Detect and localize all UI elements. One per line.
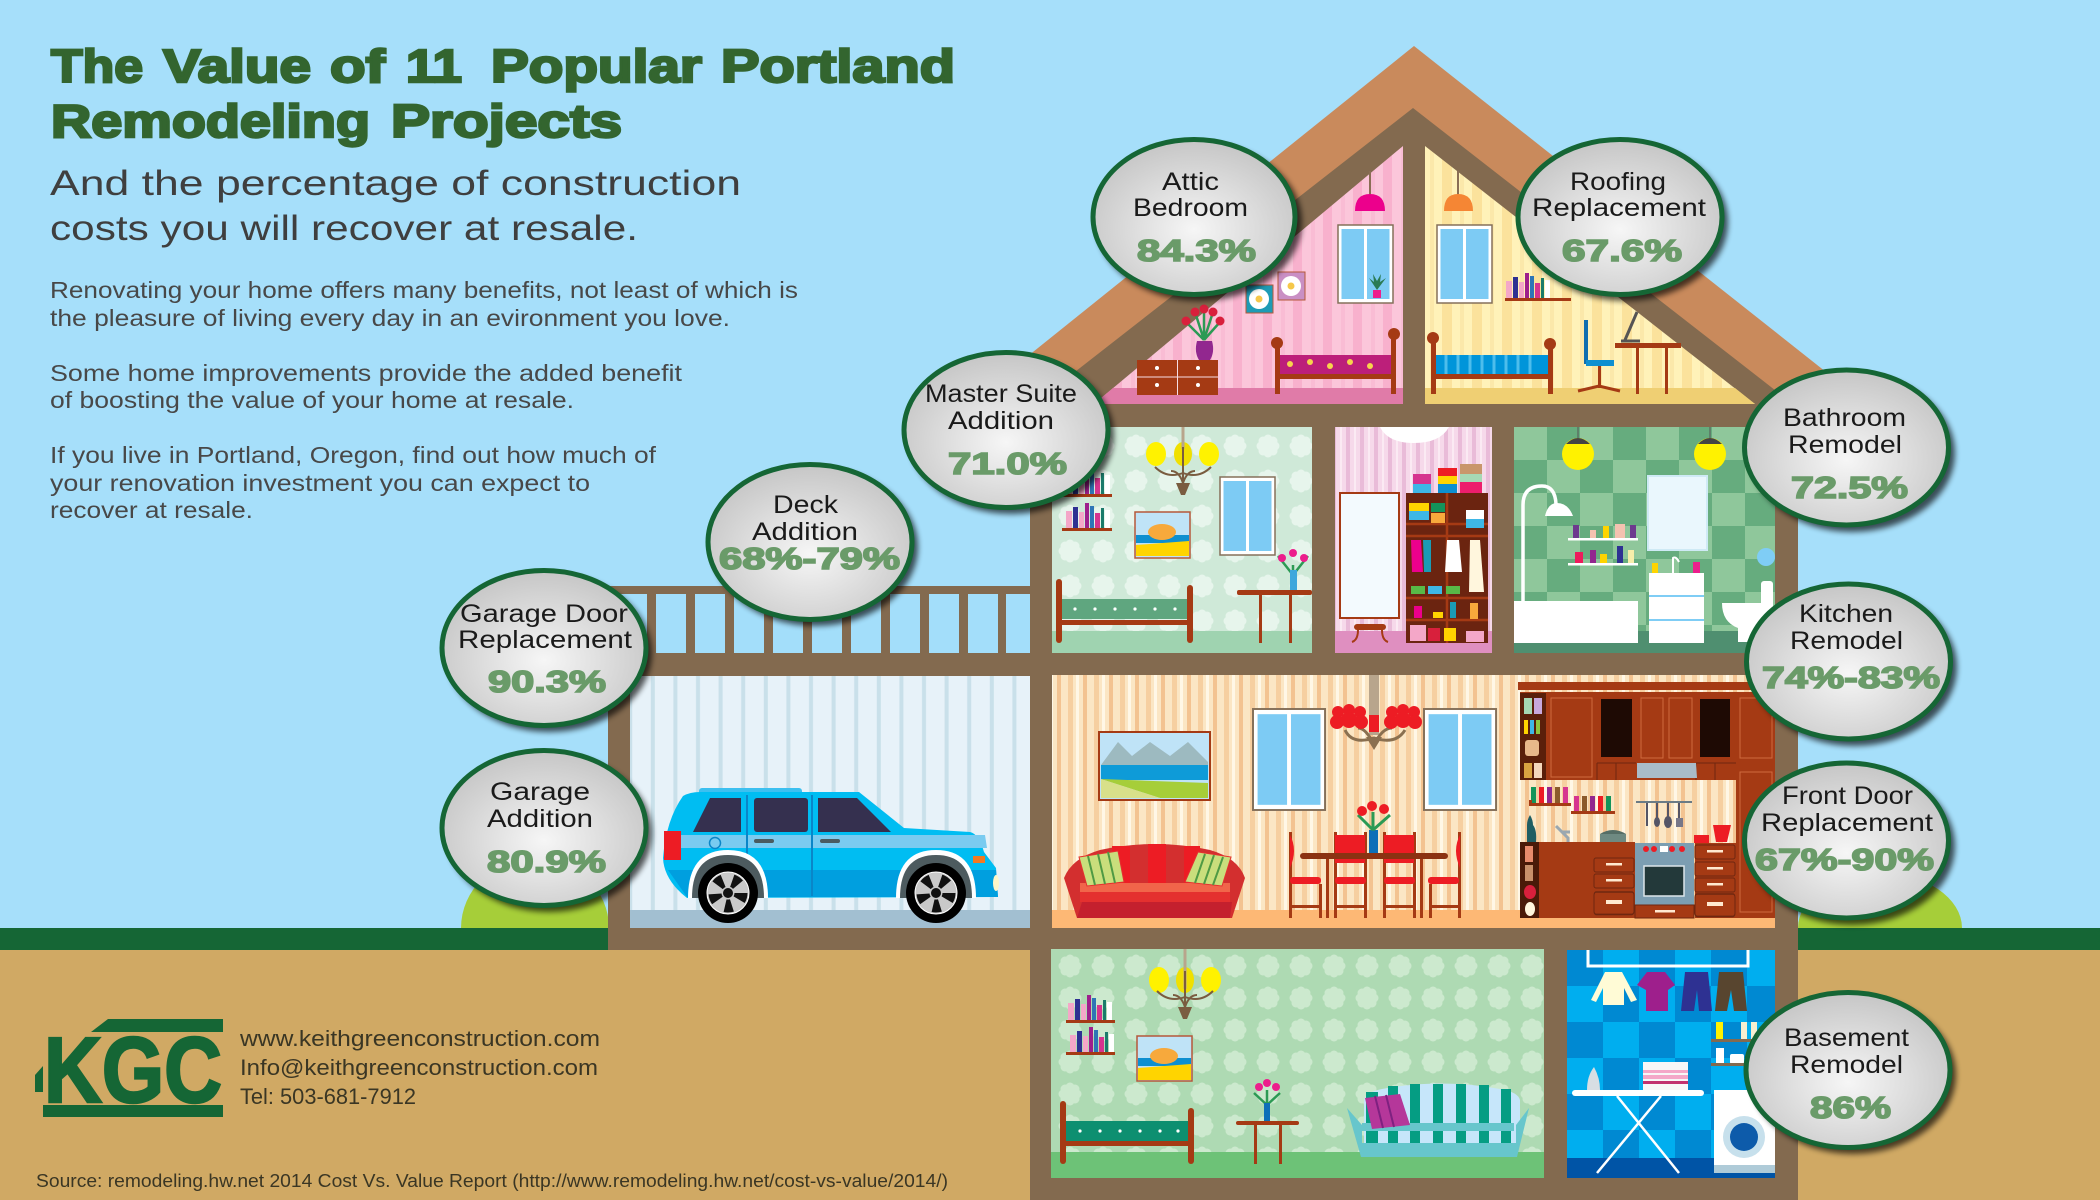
- room: garage: [630, 676, 1030, 928]
- title: Popular: [491, 40, 702, 92]
- intro text: If you live in Portland, Oregon, find out how much of: [50, 442, 657, 468]
- kitchen: [1518, 682, 1775, 918]
- sofa: [1347, 1084, 1529, 1157]
- stool: [1352, 624, 1388, 642]
- subtitle: costs you will recover at resale.: [50, 209, 638, 248]
- ironing board: [1572, 1090, 1704, 1173]
- bubble: deck addition: Deck: [773, 491, 839, 519]
- bubble: front door replacement: [1744, 763, 1955, 925]
- bubble: garage addition: Garage: [490, 778, 590, 806]
- bed: [1427, 332, 1556, 394]
- intro text: the pleasure of living every day in an evironment you love.: [50, 305, 730, 331]
- bubble: roofing replacement: 67.6%: [1562, 233, 1682, 268]
- ground: [0, 950, 2100, 1200]
- chandelier: [1146, 427, 1219, 495]
- bubble: master suite addition: Addition: [948, 407, 1054, 435]
- table and vase: [1237, 549, 1312, 643]
- bubble: kitchen remodel: 74%-83%: [1762, 660, 1940, 695]
- oven: [1635, 843, 1694, 918]
- subtitle: [50, 164, 741, 248]
- bubble: garage door replacement: Replacement: [458, 626, 632, 654]
- intro text: recover at resale.: [50, 497, 253, 523]
- bubble: bathroom remodel: 72.5%: [1791, 470, 1908, 505]
- washing machine: [1714, 1090, 1775, 1173]
- bubble: roofing replacement: Replacement: [1532, 194, 1706, 222]
- bubble: basement remodel: Basement: [1784, 1024, 1909, 1052]
- toilet: [1722, 548, 1775, 642]
- bubble: roofing replacement: Roofing: [1570, 168, 1666, 196]
- contact details: [239, 1026, 600, 1109]
- bubble: bathroom remodel: Bathroom: [1783, 404, 1906, 432]
- rear wheel: [688, 850, 768, 923]
- contact details: www.keithgreenconstruction.com: [239, 1026, 600, 1051]
- bed: [1060, 1101, 1194, 1164]
- bubble: garage door replacement: 90.3%: [488, 664, 606, 699]
- dresser: [1137, 360, 1218, 395]
- chandelier: [1330, 675, 1422, 750]
- source note: Source: remodeling.hw.net 2014 Cost Vs. Value Report (http://www.remodeling.hw.net/cost-vs-value/2014/): [36, 1171, 948, 1191]
- bubble: attic bedroom: 84.3%: [1137, 233, 1256, 268]
- title: Portland: [721, 40, 955, 92]
- intro text: [50, 277, 798, 523]
- bed: [1056, 579, 1193, 643]
- bubble: basement remodel: Remodel: [1790, 1051, 1903, 1079]
- bathtub: [1514, 601, 1638, 643]
- garage frame and railing: [608, 586, 1032, 950]
- stacked boxes: [1413, 464, 1482, 493]
- bubble: deck addition: 68%-79%: [719, 541, 900, 576]
- countertop items: [1527, 815, 1731, 843]
- sink cabinet: [1649, 558, 1704, 643]
- intro text: of boosting the value of your home at resale.: [50, 387, 574, 413]
- left bush: [461, 858, 609, 998]
- bed: [1271, 328, 1400, 394]
- title: The: [51, 40, 143, 92]
- bubble: front door replacement: Replacement: [1761, 809, 1933, 837]
- chandelier: [1149, 949, 1221, 1019]
- bubble: front door replacement: Front Door: [1782, 782, 1913, 810]
- spice shelves: [1529, 787, 1615, 814]
- shelves with books: [1066, 995, 1115, 1055]
- window: [1437, 225, 1492, 303]
- intro text: Renovating your home offers many benefits, not least of which is: [50, 277, 798, 303]
- upper cabinets: [1518, 682, 1775, 780]
- room: closet: [1335, 427, 1492, 653]
- intro text: your renovation investment you can expect to: [50, 470, 590, 496]
- dining set: [1289, 801, 1461, 918]
- picture: [1137, 1036, 1192, 1081]
- title: [51, 40, 955, 147]
- lamp: [1355, 171, 1385, 211]
- folded towels: [1643, 1062, 1688, 1090]
- grass strip: [0, 928, 2100, 950]
- bubble: master suite addition: [904, 352, 1114, 514]
- desk and monitor: [1615, 312, 1681, 394]
- contact details: Tel: 503-681-7912: [240, 1084, 416, 1109]
- window: [1338, 225, 1393, 303]
- room: master suite: [1052, 427, 1312, 653]
- contact details: Info@keithgreenconstruction.com: [240, 1055, 598, 1080]
- bubble: master suite addition: Master Suite: [925, 380, 1077, 408]
- range hood: [1637, 763, 1697, 778]
- bubble: garage addition: [442, 750, 652, 912]
- mirror: [1648, 476, 1707, 550]
- room: bathroom: [1514, 427, 1775, 653]
- bubble: master suite addition: 71.0%: [948, 446, 1067, 481]
- tulips vase: [1182, 304, 1224, 360]
- ceiling lamp: [1380, 427, 1449, 443]
- bubble: garage addition: 80.9%: [487, 844, 606, 879]
- mirror: [1340, 493, 1399, 618]
- bubble: garage door replacement: Garage Door: [460, 600, 628, 628]
- shower: [1523, 486, 1573, 601]
- room: attic bedroom pink: [1094, 146, 1403, 404]
- hanging clothes: [1591, 972, 1747, 1011]
- lamp: [1444, 171, 1473, 211]
- sofa: [1064, 844, 1245, 918]
- house structure: [608, 46, 1826, 1200]
- title: 11: [406, 40, 462, 92]
- pictures: [1246, 272, 1305, 313]
- right bush: [1798, 873, 1962, 983]
- bubble: bathroom remodel: [1744, 370, 1955, 532]
- bookshelf: [1505, 273, 1571, 301]
- room: laundry: [1567, 950, 1775, 1178]
- utensils: [1636, 801, 1692, 828]
- bubble: garage addition: Addition: [487, 805, 593, 833]
- ceiling lamps: [1562, 427, 1726, 470]
- bubble: bathroom remodel: Remodel: [1788, 431, 1902, 459]
- roof: [1028, 46, 1826, 412]
- clothes rail: [1588, 950, 1748, 966]
- house frame: [1030, 108, 1798, 1200]
- room: attic bedroom yellow: [1425, 146, 1755, 404]
- shelves with books: [1060, 468, 1112, 531]
- front wheel: [896, 850, 976, 923]
- windows: [1253, 709, 1496, 810]
- title: of: [330, 40, 386, 92]
- landscape picture: [1099, 732, 1210, 800]
- title: Projects: [391, 95, 622, 147]
- bubble: attic bedroom: [1093, 140, 1302, 301]
- subtitle: And the percentage of construction: [50, 164, 741, 203]
- plant: [1369, 274, 1386, 298]
- car: [663, 788, 999, 923]
- base cabinets: [1520, 763, 1775, 918]
- wardrobe: [1406, 464, 1488, 643]
- bubble: deck addition: Addition: [752, 518, 858, 546]
- bubble: basement remodel: [1746, 992, 1956, 1154]
- bubble: kitchen remodel: Remodel: [1790, 627, 1903, 655]
- bottle shelves: [1568, 524, 1638, 566]
- bubble: kitchen remodel: [1746, 584, 1957, 746]
- laundry shelves: [1711, 1022, 1775, 1066]
- room: living, dining and kitchen: [1052, 675, 1775, 928]
- room: basement family: [1051, 949, 1544, 1178]
- bubble: front door replacement: 67%-90%: [1755, 842, 1934, 877]
- chair: [1578, 320, 1620, 391]
- picture: [1135, 512, 1190, 558]
- KGC logo: KGC: [44, 1018, 222, 1122]
- bubble: attic bedroom: Attic: [1162, 168, 1219, 196]
- bubble: kitchen remodel: Kitchen: [1799, 600, 1893, 628]
- title: Value: [163, 40, 311, 92]
- intro text: Some home improvements provide the added benefit: [50, 360, 683, 386]
- bubble: roofing replacement: [1518, 140, 1728, 301]
- table and vase: [1236, 1079, 1299, 1164]
- bubble: basement remodel: 86%: [1810, 1090, 1891, 1125]
- title: Remodeling: [51, 95, 370, 147]
- iron: [1587, 1067, 1600, 1090]
- bubble: garage door replacement: [442, 570, 652, 732]
- window: [1220, 477, 1275, 555]
- bubble: attic bedroom: Bedroom: [1133, 194, 1248, 222]
- bubble: deck addition: [708, 464, 918, 626]
